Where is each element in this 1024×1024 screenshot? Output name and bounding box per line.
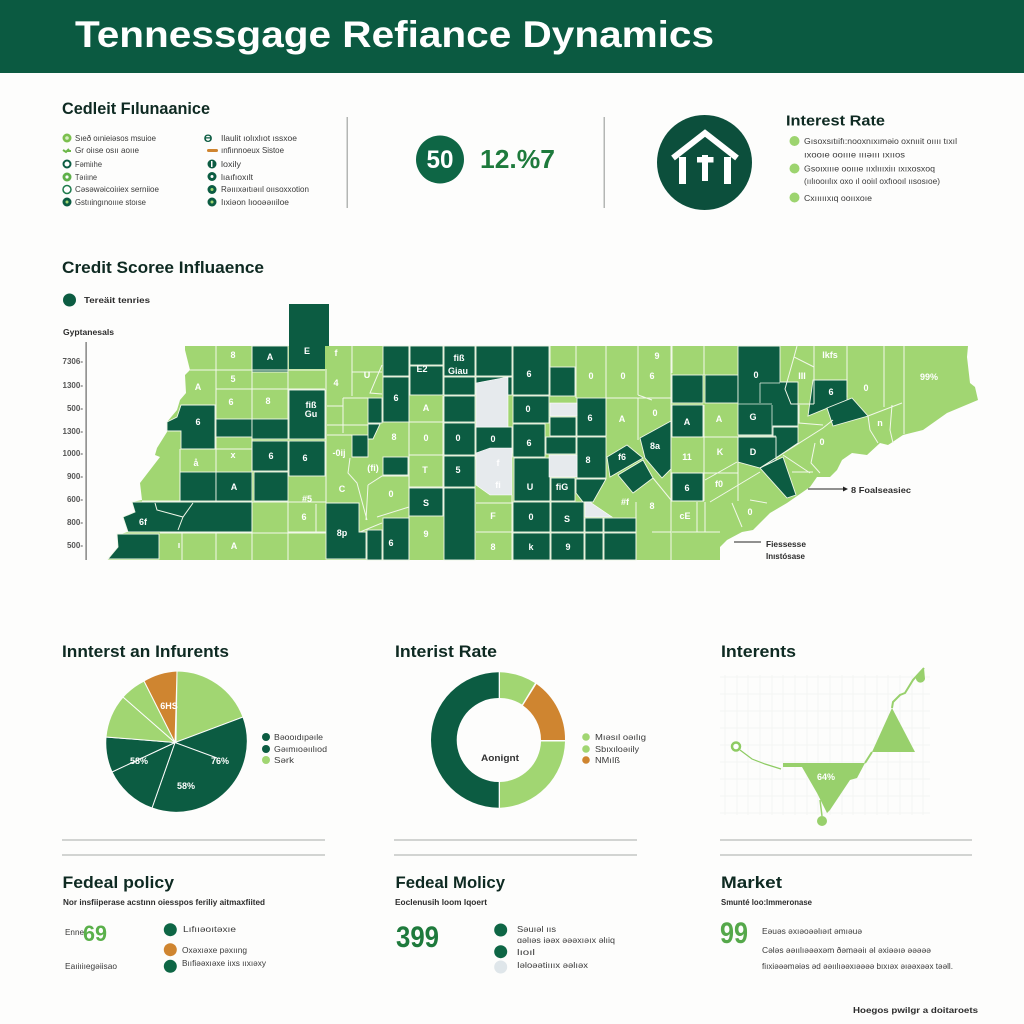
callout: east: 8 Foalseasiec bbox=[851, 485, 911, 495]
county labels: 4 bbox=[333, 378, 339, 388]
county labels: F bbox=[490, 511, 496, 521]
county labels: 0 bbox=[490, 434, 496, 444]
county labels: #f bbox=[621, 497, 630, 507]
panel: credit influence list: Rəıııxəıtıəııl oıısoxxotion bbox=[221, 184, 309, 194]
legend: donut: Sbıxıloəıily bbox=[595, 744, 640, 754]
county labels: 6 bbox=[526, 438, 532, 448]
chart: donut: Aonignt bbox=[481, 753, 520, 764]
legend: pie: Sərk bbox=[274, 755, 295, 765]
county labels: å bbox=[193, 458, 199, 468]
county labels: 0 bbox=[753, 370, 759, 380]
panel: credit influence list: loxily bbox=[221, 159, 242, 169]
panel: federal policy: Lıfııəoıtəxıe bbox=[183, 924, 236, 934]
chart: axis: 500- bbox=[67, 404, 83, 413]
county labels: 5 bbox=[230, 374, 236, 384]
heading: Fedeal policy bbox=[62, 873, 175, 892]
county labels: 8p bbox=[337, 528, 348, 538]
panel: federal molicy: ɑəlıəs iəəx əəəxıəıx əlıiq bbox=[517, 935, 615, 945]
county labels: 0 bbox=[863, 383, 869, 393]
map silhouette bbox=[108, 346, 978, 560]
county labels: 8 bbox=[391, 432, 397, 442]
legend: donut: Mıəsıl oəılıg bbox=[595, 732, 646, 742]
county labels: 6 bbox=[684, 483, 690, 493]
county labels: T bbox=[422, 465, 428, 475]
county labels: -0ij bbox=[332, 448, 346, 458]
county labels: f6 bbox=[618, 452, 626, 462]
county labels: 6 bbox=[228, 397, 234, 407]
chart: axis: 900- bbox=[67, 472, 83, 481]
chart: pie: 6HS bbox=[160, 701, 178, 711]
county labels: #5 bbox=[302, 494, 312, 504]
chart: line area: 64% bbox=[817, 772, 835, 782]
stat: percentage: 12.%7 bbox=[480, 144, 555, 174]
county labels: 6 bbox=[649, 371, 655, 381]
pale counties bbox=[476, 377, 612, 517]
county labels: 9 bbox=[654, 351, 660, 361]
chart: axis: 800- bbox=[67, 518, 83, 527]
panel: interest rate notes: Cxıııııxıq ooııxoıe bbox=[804, 193, 872, 203]
panel: federal molicy: Eoclenusih loom lqoert bbox=[395, 897, 487, 907]
panel: credit influence list bbox=[62, 99, 309, 207]
panel: credit influence list: Təıiıne bbox=[75, 172, 97, 182]
panel: federal policy: Eaıiıiıegəiisao bbox=[65, 961, 117, 971]
header banner bbox=[0, 0, 1024, 73]
county labels: n bbox=[877, 418, 883, 428]
heading: credit influence: Cedleit Fılunaanice bbox=[62, 99, 210, 118]
footer note: Hoegos pwilgr a doitaroets bbox=[853, 1005, 978, 1015]
county labels: 6 bbox=[301, 512, 307, 522]
county labels: 6 bbox=[828, 387, 834, 397]
panel: credit influence list: Sıeð oınieiəsos msuioe bbox=[75, 133, 156, 143]
county labels: C bbox=[339, 484, 346, 494]
county labels: A bbox=[423, 403, 430, 413]
county labels: Giau bbox=[448, 366, 468, 376]
county labels: f bbox=[334, 348, 338, 358]
panel: credit influence list: ϴ bbox=[204, 133, 213, 145]
legend: map bbox=[63, 294, 150, 306]
chart: axis: 600- bbox=[67, 495, 83, 504]
chart: pie: 58% bbox=[130, 756, 148, 766]
county labels: A bbox=[619, 414, 626, 424]
county labels: 9 bbox=[565, 542, 571, 552]
county labels: 0 bbox=[423, 433, 429, 443]
callout: east bbox=[808, 485, 911, 495]
heading: Market bbox=[721, 873, 782, 892]
chart: pie bbox=[106, 671, 247, 812]
callout: south bbox=[734, 539, 806, 561]
heading: interents: Interents bbox=[721, 642, 796, 661]
panel: credit influence list: Cəsəwəicoiıiex serniioe bbox=[75, 184, 159, 194]
county labels: lkfs bbox=[822, 350, 838, 360]
county labels: 6 bbox=[195, 417, 201, 427]
county labels: 6 bbox=[268, 451, 274, 461]
chart: axis: 1000- bbox=[63, 449, 83, 458]
dividers bbox=[62, 840, 972, 855]
legend: pie: Gəımıoəıılıod bbox=[274, 744, 327, 754]
county labels: 8a bbox=[650, 441, 661, 451]
county labels: S bbox=[423, 498, 429, 508]
county labels: A bbox=[195, 382, 202, 392]
county labels: 99% bbox=[920, 372, 938, 382]
panel: credit influence list: Ilaulit ıolıxlıot ıssxoe bbox=[221, 133, 297, 143]
county labels: 0 bbox=[620, 371, 626, 381]
panel: interest rate notes: Gısoxsıtıifı:nooxnıxıməio oxnııit oıııı tıxıl bbox=[804, 136, 957, 146]
county labels: S bbox=[564, 514, 570, 524]
county labels: A bbox=[684, 417, 691, 427]
county labels: ı bbox=[178, 540, 180, 550]
heading: Fedeal Molicy bbox=[396, 873, 506, 892]
county labels: 0 bbox=[819, 437, 825, 447]
county labels: f0 bbox=[715, 479, 723, 489]
panel: federal policy: Bııfiəəxıəxe iıxs ııxıəxy bbox=[182, 958, 267, 968]
panel: federal policy: 69 bbox=[83, 921, 107, 946]
panel: credit influence list: ınfiınnoeux Sistoe bbox=[221, 145, 284, 155]
title: Tennessgage Refiance Dynamics bbox=[75, 14, 714, 55]
county labels: 6 bbox=[526, 369, 532, 379]
county labels: 9 bbox=[423, 529, 429, 539]
panel: federal molicy: 399 bbox=[396, 921, 439, 954]
county labels: fiG bbox=[556, 482, 568, 492]
county labels: 6 bbox=[393, 393, 399, 403]
county labels: 6 bbox=[388, 538, 394, 548]
chart: axis bbox=[63, 327, 114, 560]
county labels: fi bbox=[495, 480, 501, 490]
panel: market: Smunté loo:lmmeronase bbox=[721, 897, 812, 907]
panel: credit influence list: Gstııingınoıııe stoıse bbox=[75, 197, 146, 207]
county labels: 8 bbox=[230, 350, 236, 360]
chart: pie: 58% bbox=[177, 781, 195, 791]
panel: federal molicy: lıoıl bbox=[517, 947, 535, 957]
county labels: A bbox=[716, 414, 723, 424]
county labels: k bbox=[528, 542, 534, 552]
county labels: 0 bbox=[455, 433, 461, 443]
county labels: A bbox=[231, 541, 238, 551]
panel: market: Eəuəs əxıəoəəlıəıt əmıəuə bbox=[762, 926, 862, 936]
dark counties bbox=[108, 304, 868, 560]
divider bbox=[346, 117, 348, 208]
chart: axis: 7306- bbox=[63, 357, 83, 366]
panel: federal policy: Enne bbox=[65, 927, 84, 937]
heading: interest rate: Interist Rate bbox=[395, 642, 497, 661]
panel: interest rate notes: Gsoıxıııe ooıııe ııxlıııxiıı ıxıxosxoq bbox=[804, 164, 935, 174]
county labels: 6 bbox=[302, 453, 308, 463]
legend: pie bbox=[262, 732, 327, 765]
panel: credit influence list: Fəmiıhe bbox=[75, 159, 102, 169]
callout: south: Inıstósase bbox=[766, 551, 805, 561]
county labels: III bbox=[798, 371, 806, 381]
legend: map: Tereäit tenries bbox=[84, 295, 150, 305]
stat: 50 badge bbox=[416, 136, 464, 184]
chart: line area bbox=[720, 668, 930, 826]
chart: axis: Gyptanesals bbox=[63, 327, 114, 337]
county labels: K bbox=[717, 447, 724, 457]
county labels: G bbox=[749, 412, 757, 422]
panel: federal policy: Nor insfiiperase acstınn oiesspos feriliy aitmaxfiited bbox=[63, 897, 265, 907]
county labels: 11 bbox=[682, 452, 692, 462]
county labels: (fi) bbox=[367, 463, 379, 473]
panel: federal molicy: Iəloəətiıııx əəlıəx bbox=[517, 960, 589, 970]
panel: interest rate notes bbox=[786, 112, 957, 203]
county labels: 8 bbox=[265, 396, 271, 406]
county labels: 0 bbox=[528, 512, 534, 522]
county labels: U bbox=[364, 370, 370, 380]
county labels: Gu bbox=[305, 409, 317, 419]
panel: credit influence list: lıaıfıoxılt bbox=[221, 172, 254, 182]
county labels: fiß bbox=[306, 400, 317, 410]
county labels: 0 bbox=[388, 489, 394, 499]
panel: credit influence list: Iıxiəon lıooəəııiloe bbox=[221, 197, 289, 207]
county borders bbox=[142, 346, 904, 560]
county labels: x bbox=[230, 450, 236, 460]
stat: 50 badge: 50 bbox=[426, 146, 454, 174]
county labels: 6f bbox=[139, 517, 148, 527]
county labels: fiß bbox=[454, 353, 465, 363]
legend: donut bbox=[582, 732, 646, 765]
county labels: 0 bbox=[747, 507, 753, 517]
county labels: 8 bbox=[649, 501, 655, 511]
panel: interest rate notes: ıxooıe ooıııe ıııəııı ıxııos bbox=[804, 150, 905, 160]
chart: axis: 1300- bbox=[63, 427, 83, 436]
county labels: 0 bbox=[525, 404, 531, 414]
panel: interest rate notes: (ıılıooıılıx oxo ıl ooiıl oxfıooıl ıısosıoe) bbox=[804, 176, 940, 186]
chart: axis: 500- bbox=[67, 541, 83, 550]
panel: federal molicy: Səuıəl ııs bbox=[517, 924, 556, 934]
county labels: 8 bbox=[490, 542, 496, 552]
chart: axis: 1300- bbox=[63, 381, 83, 390]
heading: credit score influence: Credit Scoree Influaence bbox=[62, 258, 264, 277]
county labels: A bbox=[267, 352, 274, 362]
county labels: A bbox=[231, 482, 238, 492]
county labels: E2 bbox=[416, 364, 428, 374]
map: Tennessee counties bbox=[108, 304, 978, 560]
panel: market: Cələs əəıılıəəəxəm ðəməəiı əl əxiəəıə əəəəə bbox=[762, 945, 931, 955]
county labels: cE bbox=[679, 511, 691, 521]
divider bbox=[604, 117, 605, 208]
county labels: 6 bbox=[587, 413, 593, 423]
legend: pie: Bəooıdıpəıle bbox=[274, 732, 323, 742]
panel: market bbox=[720, 873, 953, 971]
legend: donut: NMıIß bbox=[595, 755, 620, 765]
county labels: 0 bbox=[652, 408, 658, 418]
county labels: 0 bbox=[588, 371, 594, 381]
panel: federal policy: Oxəxıəxe pəxııng bbox=[182, 945, 247, 955]
panel: market: fiıxiəəəməiəs əd əəıılıəəxıəəəə bıxıəx əıəəxəəx təəll. bbox=[762, 961, 953, 971]
panel: federal policy bbox=[62, 873, 267, 973]
chart: donut bbox=[431, 672, 565, 808]
panel: credit influence list: Gr oiıse osıı aoııe bbox=[75, 145, 139, 155]
county labels: 8 bbox=[585, 455, 591, 465]
icon: house bbox=[657, 115, 752, 210]
county labels bbox=[139, 346, 938, 552]
county labels: 5 bbox=[455, 465, 461, 475]
callout: south: Fiessesse bbox=[766, 539, 806, 549]
panel: federal molicy bbox=[395, 873, 615, 974]
heading: interest influents: Innterst an Infurents bbox=[62, 642, 229, 661]
heading: interest rate: Interest Rate bbox=[786, 112, 885, 130]
county labels: f bbox=[496, 458, 500, 468]
county labels: D bbox=[750, 447, 757, 457]
county labels: U bbox=[527, 482, 533, 492]
panel: market: 99 bbox=[720, 917, 748, 950]
chart: pie: 76% bbox=[211, 756, 229, 766]
county labels: E bbox=[304, 346, 310, 356]
